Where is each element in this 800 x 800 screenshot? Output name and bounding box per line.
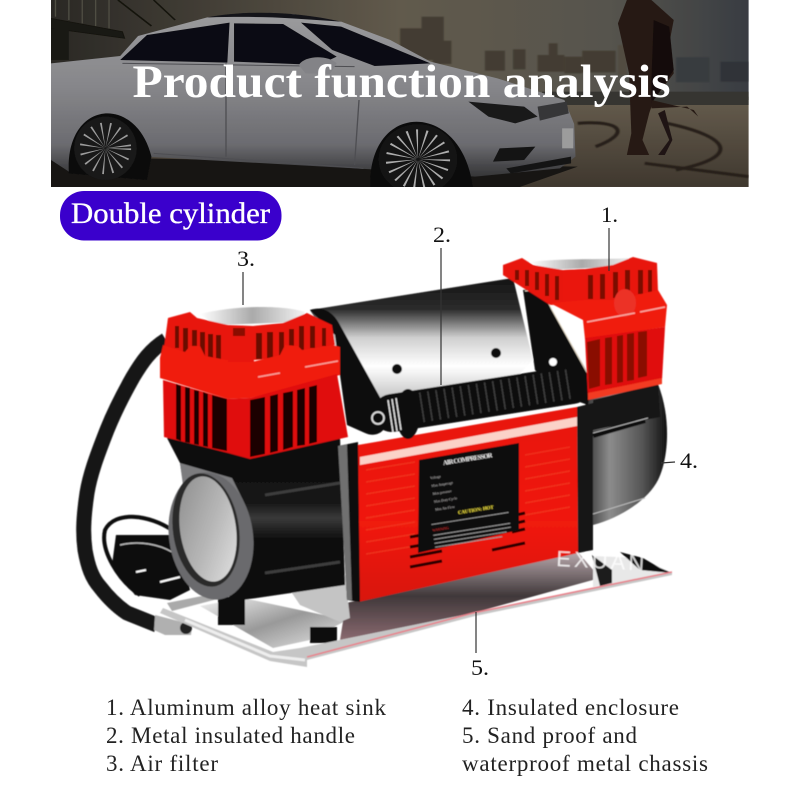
right red heat sink xyxy=(503,257,667,400)
silver cap xyxy=(530,258,634,270)
red front body xyxy=(358,407,578,602)
feature list: left column: 1. Aluminum alloy heat sink xyxy=(106,695,386,720)
chrome coil xyxy=(388,398,401,432)
right comb fins xyxy=(503,257,658,305)
dark block xyxy=(310,627,337,643)
grille xyxy=(538,102,569,121)
callout 4 xyxy=(661,448,698,473)
feature list: right column: waterproof metal chassis xyxy=(462,751,708,776)
watermark: EXUAN: EXUAN xyxy=(556,546,645,576)
couple xyxy=(618,0,698,155)
callout 3: 3. xyxy=(237,246,255,271)
metal tank cover xyxy=(310,278,533,420)
mid band xyxy=(160,345,340,399)
left comb fins xyxy=(164,312,335,362)
title: Product function analysis xyxy=(132,56,670,108)
right bottom lip xyxy=(588,378,662,400)
feature list: right column xyxy=(462,695,708,776)
bracket bolt xyxy=(372,412,384,424)
callout 1 xyxy=(601,202,618,271)
mirror xyxy=(299,57,336,70)
left bracket xyxy=(310,309,388,435)
feature list: left column: 2. Metal insulated handle xyxy=(106,723,355,748)
spring handle xyxy=(372,384,572,439)
car xyxy=(51,13,576,194)
specification plate xyxy=(418,443,519,553)
body vent slots xyxy=(410,513,525,567)
corner post fold xyxy=(228,326,254,362)
specification plate: CAUTION: HOT xyxy=(458,506,495,516)
pill badge: Double cylinder xyxy=(60,191,282,240)
skid marks on ground xyxy=(578,123,749,177)
pink shaded plate xyxy=(340,552,600,640)
headlight xyxy=(468,102,538,123)
filter end disc xyxy=(161,467,261,605)
inner chrome panel xyxy=(200,598,347,648)
left cylinder xyxy=(167,436,345,600)
grey end plate xyxy=(180,463,243,520)
door lines xyxy=(122,63,363,168)
chrome base plate xyxy=(160,552,672,667)
support post xyxy=(218,597,245,625)
bracket chrome xyxy=(290,575,350,622)
banner sky and ground xyxy=(51,0,749,187)
hose nozzle xyxy=(154,615,192,635)
comb slots xyxy=(175,326,326,359)
right corner post xyxy=(563,269,587,305)
air compressor product xyxy=(84,257,672,667)
car windows xyxy=(120,23,430,66)
band highlights xyxy=(258,361,338,377)
callout 5: 5. xyxy=(471,655,489,680)
feature list: right column: 4. Insulated enclosure xyxy=(462,695,679,720)
lower block xyxy=(163,374,348,459)
rear wheel xyxy=(74,117,137,180)
feature list: left column xyxy=(106,695,386,776)
right metal band xyxy=(577,403,593,553)
left metal band xyxy=(338,442,360,602)
callout 1: 1. xyxy=(601,202,618,227)
callout 3 xyxy=(237,246,255,305)
bridge xyxy=(51,0,175,60)
callout 2: 2. xyxy=(433,222,451,247)
front wheel xyxy=(378,124,457,187)
right band xyxy=(550,290,667,339)
pill badge: Double cylinder: Double cylinder xyxy=(71,197,270,230)
bumper details xyxy=(493,147,571,173)
air hose xyxy=(84,340,166,625)
city skyline xyxy=(400,17,749,82)
lower fin slots xyxy=(176,384,227,451)
callout 5 xyxy=(471,612,489,680)
right lower block xyxy=(585,327,665,398)
left red heat sink: air filter xyxy=(160,307,348,459)
banner dark overlay xyxy=(51,0,749,187)
specification plate: Max Amperage xyxy=(431,481,454,488)
feature list: right column: 5. Sand proof and xyxy=(462,723,638,748)
round boss on band xyxy=(614,289,636,317)
specification plate: Max Duty Cycle xyxy=(434,496,458,504)
specification plate: AIR COMPRESSOR xyxy=(443,452,493,467)
silver filter cap xyxy=(200,307,305,325)
right chrome area xyxy=(593,556,672,587)
wheel arches xyxy=(69,113,473,187)
right bracket xyxy=(523,290,592,405)
coiled cable xyxy=(104,517,190,600)
right comb slots xyxy=(515,270,652,300)
callout 4: 4. xyxy=(680,448,698,473)
rear rail xyxy=(167,593,225,611)
front rail xyxy=(160,572,672,667)
right cylinder: insulated enclosure xyxy=(585,384,667,525)
specification plate: Max pressure xyxy=(432,489,452,496)
car dark roof xyxy=(207,13,341,22)
specification plate: WARNING xyxy=(432,526,450,532)
car body xyxy=(51,14,576,177)
road under the car xyxy=(51,157,578,187)
spring end collar xyxy=(396,389,420,439)
specification plate: Voltage xyxy=(430,474,441,480)
feature list: left column: 3. Air filter xyxy=(106,751,218,776)
right lower slots xyxy=(587,331,647,389)
banner photo: car and couple xyxy=(51,0,749,194)
specification plate: Max Air Flow xyxy=(435,505,456,512)
